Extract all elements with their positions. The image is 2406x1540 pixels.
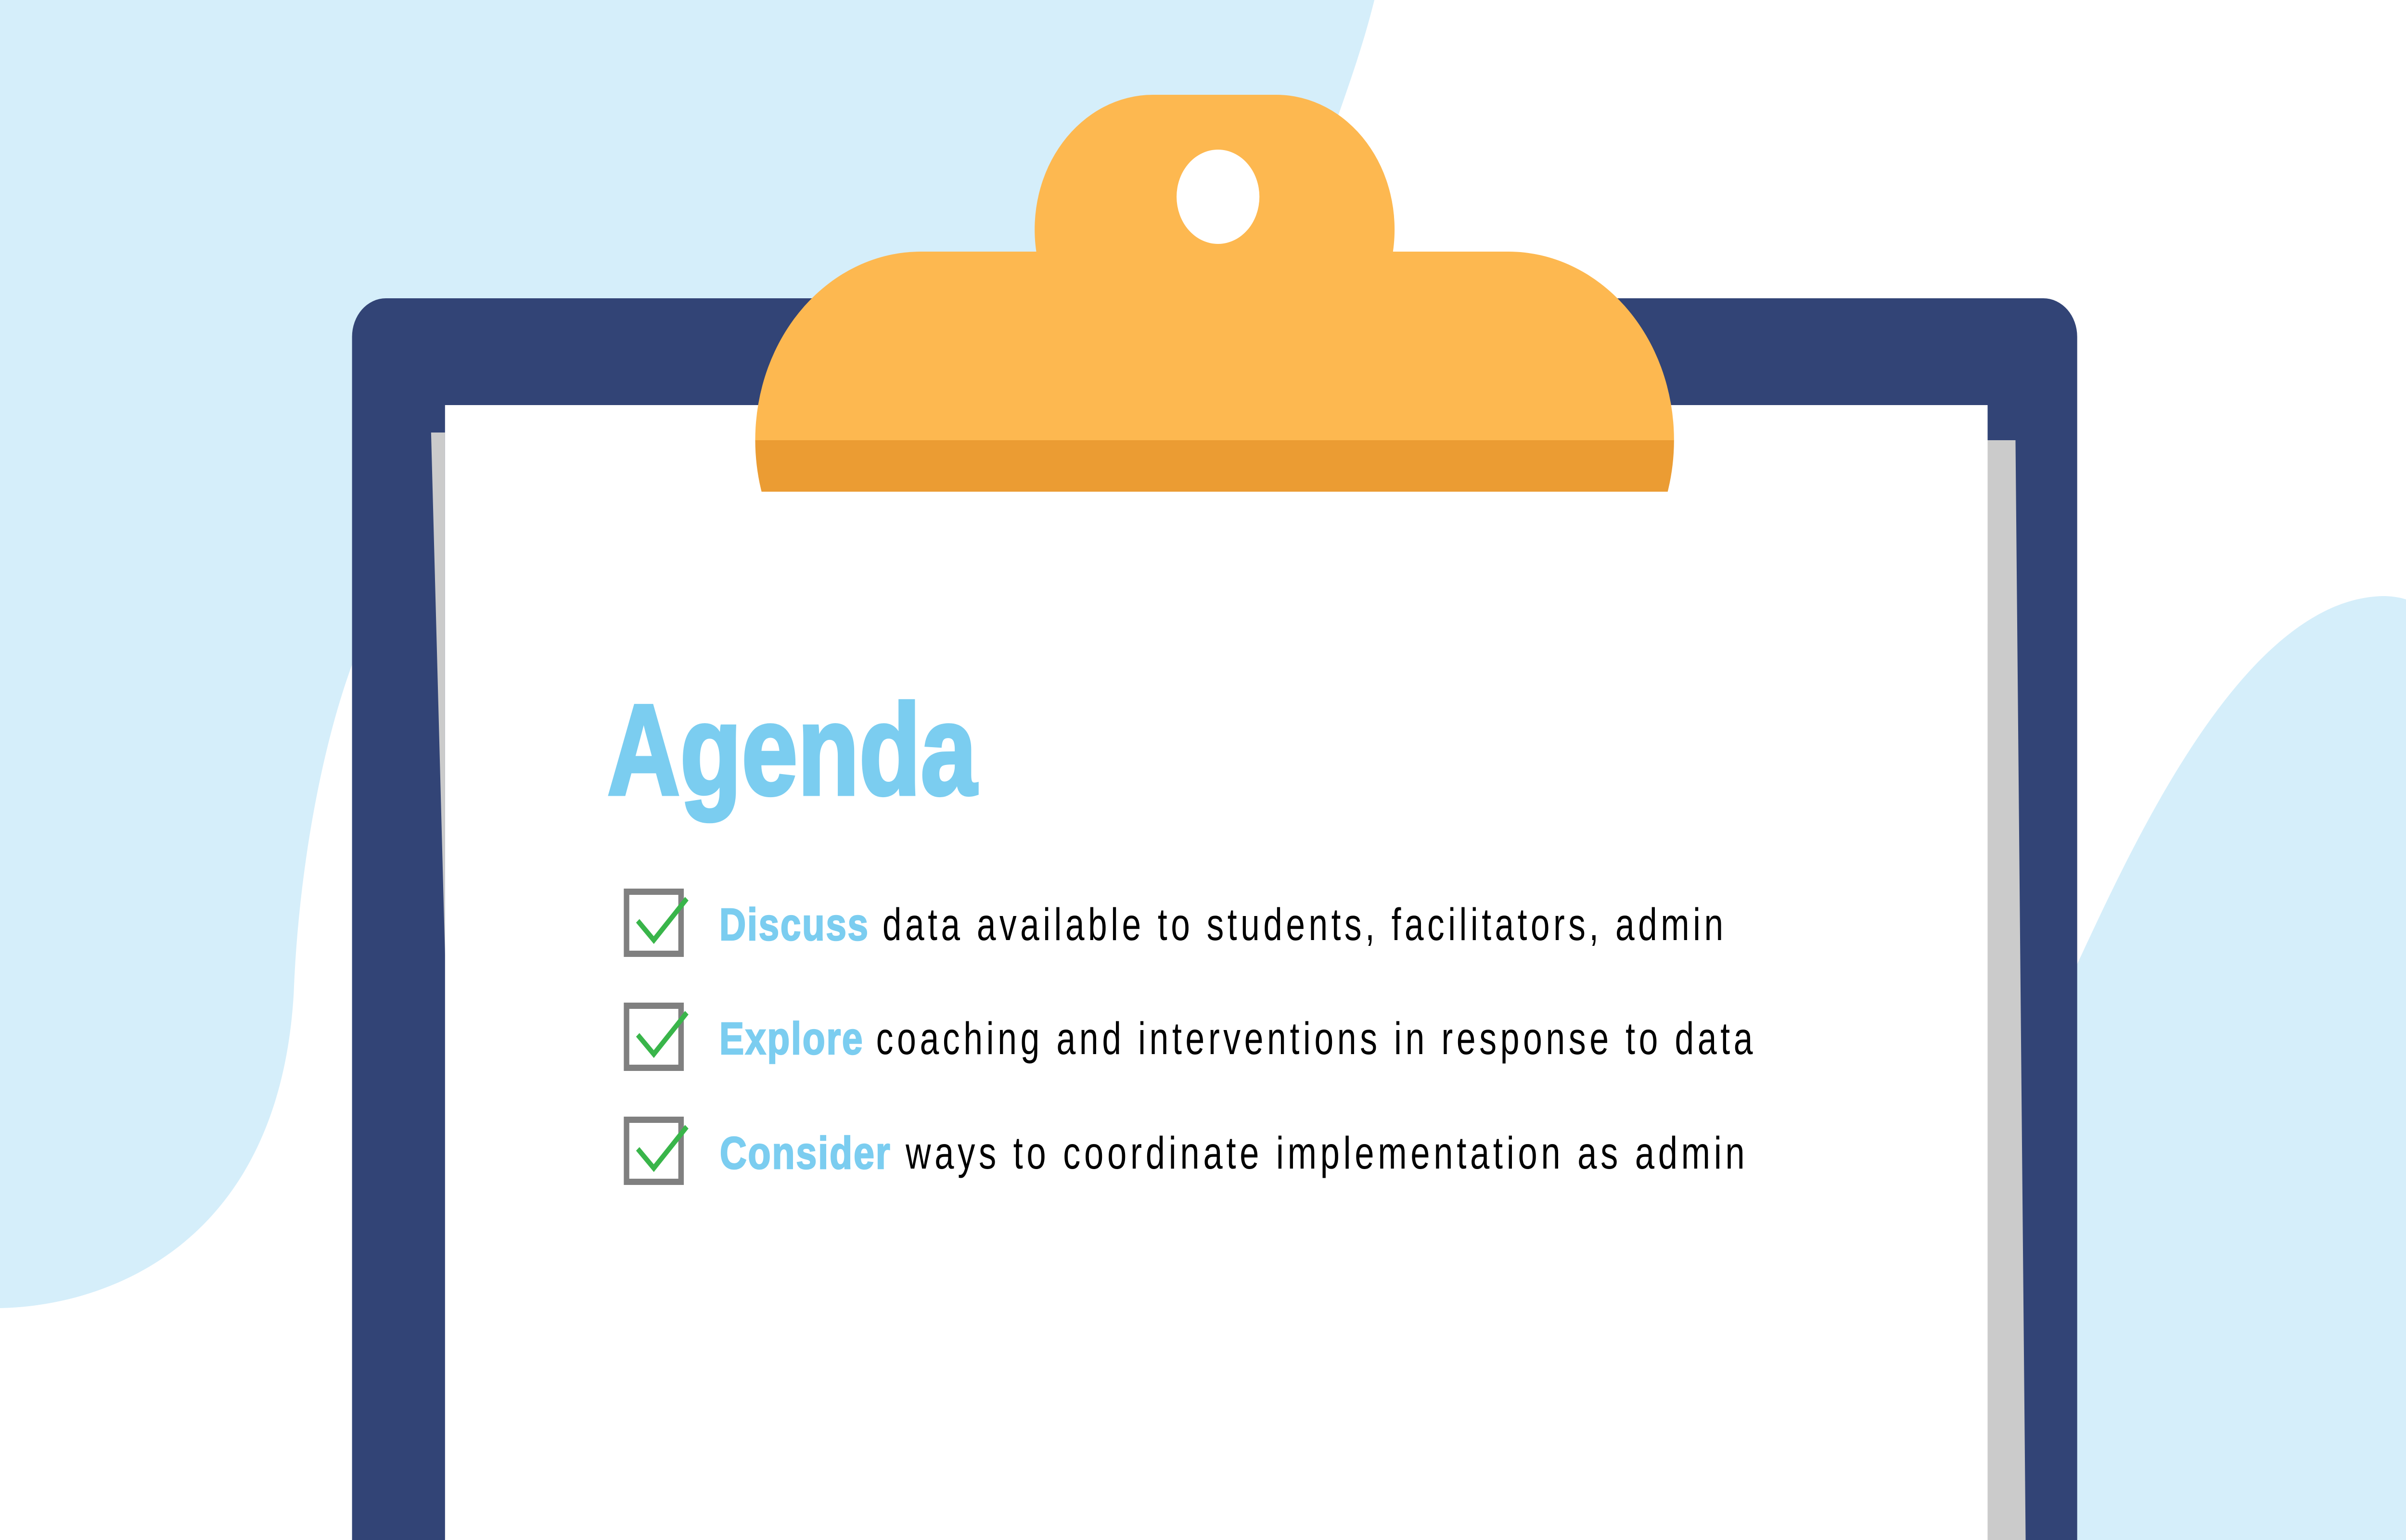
title: Agenda (607, 678, 977, 822)
item 2 description: coaching and interventions in response to data (876, 1013, 1756, 1064)
item 1 description: data available to students, facilitators, admin (883, 899, 1727, 950)
under-sheet shadow: left (431, 433, 445, 955)
clip assembly (755, 95, 1674, 492)
checkbox 1 (627, 892, 687, 954)
agenda item 2 (627, 1005, 1756, 1068)
item 1 text: Discuss (719, 899, 870, 950)
background blob: right (2071, 596, 2406, 1540)
checkbox 2 (627, 1005, 687, 1068)
under-sheet shadow: right (1988, 440, 2026, 1540)
item 3 description: ways to coordinate implementation as admin (905, 1127, 1748, 1178)
clip: bottom band (755, 440, 1674, 492)
item 3 text: Consider (720, 1127, 891, 1178)
agenda item 3 (627, 1120, 1748, 1182)
clip: hole (1177, 150, 1259, 244)
item 2 text: Explore (719, 1013, 864, 1064)
paper sheet (445, 405, 1988, 1540)
agenda item 1 (627, 892, 1727, 954)
clip: top tab (1035, 95, 1395, 252)
checkbox 3 (627, 1120, 687, 1182)
clip: main body (755, 252, 1674, 440)
background blob: top left (0, 0, 1374, 1308)
clipboard board (352, 298, 2077, 1540)
